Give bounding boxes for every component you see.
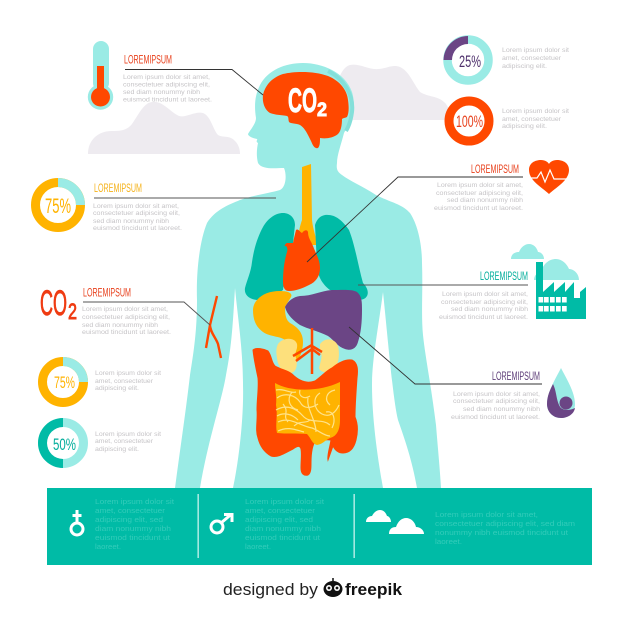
text: 100%: amet, consectetuer	[502, 116, 562, 123]
block: windpipe text: LOREMIPSUM	[94, 181, 142, 195]
text: 100%: Lorem ipsum dolor sit	[502, 108, 569, 115]
block: heart text: euismod tincidunt ut laoreet.	[434, 205, 523, 212]
icon: male symbol	[211, 514, 232, 533]
text: banner column 2: euismod tincidunt ut	[245, 533, 320, 542]
text: 50%	[95, 431, 161, 453]
liver	[285, 290, 362, 350]
text: banner column 1: adipiscing elit, sed	[95, 515, 163, 524]
text: 25%: Lorem ipsum dolor sit	[502, 47, 569, 54]
bottom banner	[47, 488, 592, 565]
block: liver text: sed diam nonummy nibh	[463, 406, 540, 413]
block: factory text: sed diam nonummy nibh	[451, 306, 528, 313]
text: banner column 2: Lorem ipsum dolor sit	[245, 497, 324, 506]
text: 100%	[502, 108, 569, 130]
text: banner column 3: Lorem ipsum dolor sit amet,	[435, 510, 538, 519]
small intestine	[275, 382, 340, 445]
donut: 75% small: 75%	[54, 374, 75, 392]
block: thermometer text: consectetuer adipiscing elit,	[123, 82, 210, 88]
icon: freepik logo	[324, 578, 342, 597]
kidneys and ureters	[276, 328, 339, 374]
right lung	[315, 215, 368, 300]
block: factory text: consectetuer adipiscing elit,	[441, 299, 528, 306]
block: liver text: euismod tincidunt ut laoreet.	[451, 414, 540, 421]
block: liver text: consectetuer adipiscing elit,	[453, 398, 540, 405]
text: 50%: amet, consectetuer	[95, 438, 154, 445]
blood vessel in arm	[206, 296, 221, 358]
label: CO2 in brain: 2	[317, 100, 327, 121]
icon: CO2: CO	[40, 284, 67, 323]
block: heart text: Lorem ipsum dolor sit amet,	[437, 182, 523, 189]
footer: designed by freepik	[223, 578, 403, 599]
cloud: right background	[330, 65, 452, 120]
text: 75% small: amet, consectetuer	[95, 378, 154, 385]
stomach	[253, 291, 303, 363]
text: banner column 3: laoreet.	[435, 537, 462, 546]
block: liver text	[451, 369, 540, 421]
block: thermometer text: LOREMIPSUM	[124, 52, 172, 66]
block: windpipe text: euismod tincidunt ut laoreet.	[93, 225, 182, 232]
text: banner column 1: Lorem ipsum dolor sit	[95, 497, 174, 506]
icon: drop	[547, 368, 575, 418]
text: 75% small	[95, 370, 161, 392]
text: 75% small: Lorem ipsum dolor sit	[95, 370, 161, 377]
text: banner column 3: nonummy nibh euismod tincidunt ut	[435, 528, 568, 537]
block: CO2 text: LOREMIPSUM	[83, 286, 131, 300]
leader lines	[83, 70, 542, 384]
icon: factory with clouds	[511, 244, 586, 319]
block: liver text: Lorem ipsum dolor sit amet,	[453, 391, 540, 398]
text: banner column 3: consectetuer adipiscing elit, sed diam	[435, 519, 575, 528]
cloud: left background	[88, 102, 240, 154]
brain	[263, 72, 349, 148]
text: 25%: amet, consectetuer	[502, 55, 562, 62]
text: banner column 1: amet, consectetuer	[95, 506, 166, 515]
block: thermometer text: Lorem ipsum dolor sit amet,	[123, 74, 210, 81]
block: CO2 text: consectetuer adipiscing elit,	[82, 314, 170, 321]
block: heart text: consectetuer adipiscing elit,	[436, 190, 523, 197]
icon: clouds	[366, 510, 424, 534]
block: CO2 text: euismod tincidunt ut laoreet.	[82, 329, 171, 336]
donut: 100%: 100%	[456, 113, 483, 131]
donut: 75% large: 75%	[45, 195, 71, 218]
text: banner column 3	[435, 510, 575, 546]
text: banner column 2: adipiscing elit, sed	[245, 515, 313, 524]
donut: 25%: 25%	[459, 53, 481, 71]
donut: 50%: 50%	[53, 435, 76, 454]
text: banner column 2: amet, consectetuer	[245, 506, 316, 515]
donut: 75% small	[42, 357, 88, 402]
block: factory text: LOREMIPSUM	[480, 269, 528, 283]
text: 50%: Lorem ipsum dolor sit	[95, 431, 161, 438]
block: heart text	[434, 162, 523, 212]
block: thermometer text: euismod tincidunt ut laoreet.	[123, 96, 212, 104]
block: factory text: Lorem ipsum dolor sit amet,	[442, 291, 528, 298]
large intestine	[253, 348, 357, 475]
block: factory text: euismod tincidunt ut laoreet.	[439, 314, 528, 321]
body silhouette	[175, 63, 441, 488]
block: CO2 text	[82, 286, 171, 336]
block: thermometer text	[123, 52, 212, 104]
text: 50%: adipiscing elit.	[95, 446, 139, 453]
text: banner column 1: laoreet.	[95, 542, 121, 551]
block: heart text: LOREMIPSUM	[471, 162, 519, 176]
text: 25%	[502, 47, 569, 70]
block: factory text	[439, 269, 528, 321]
text: banner column 1	[95, 497, 174, 551]
windpipe	[299, 164, 317, 245]
block: heart text: sed diam nonummy nibh	[447, 197, 523, 204]
label: CO2 in brain: CO	[288, 82, 317, 120]
text: banner column 2	[245, 497, 324, 551]
block: windpipe text	[93, 181, 182, 232]
heart organ	[283, 229, 320, 291]
text: banner column 1: diam nonummy nibh	[95, 524, 171, 533]
text: banner column 1: euismod tincidunt ut	[95, 533, 170, 542]
icon: CO2: 2	[68, 299, 77, 324]
block: CO2 text: sed diam nonummy nibh	[82, 322, 158, 329]
block: windpipe text: consectetuer adipiscing elit,	[93, 210, 180, 217]
text: 75% small: adipiscing elit.	[95, 385, 139, 392]
block: thermometer text: sed diam nonummy nibh	[123, 89, 200, 96]
text: banner column 2: laoreet.	[245, 542, 271, 551]
donut: 50%	[38, 418, 84, 468]
icon: heart with pulse	[529, 160, 569, 194]
text: banner column 2: diam nonummy nibh	[245, 524, 321, 533]
donut: 75% large	[36, 178, 85, 228]
donut: 100%	[449, 101, 489, 141]
block: CO2 text: Lorem ipsum dolor sit amet,	[82, 306, 168, 313]
text: 100%: adipiscing elit.	[502, 123, 547, 130]
text: 25%: adipiscing elit.	[502, 63, 547, 70]
block: liver text: LOREMIPSUM	[492, 369, 540, 383]
block: windpipe text: Lorem ipsum dolor sit amet,	[93, 203, 179, 210]
footer: designed by freepik: freepik	[345, 580, 403, 599]
donut: 25%	[444, 36, 488, 80]
block: windpipe text: sed diam nonummy nibh	[93, 218, 169, 225]
icon: female symbol	[71, 510, 83, 535]
left lung	[245, 213, 295, 300]
icon: thermometer	[88, 41, 113, 110]
footer: designed by freepik: designed by	[223, 581, 319, 599]
icon: CO2	[40, 284, 77, 324]
